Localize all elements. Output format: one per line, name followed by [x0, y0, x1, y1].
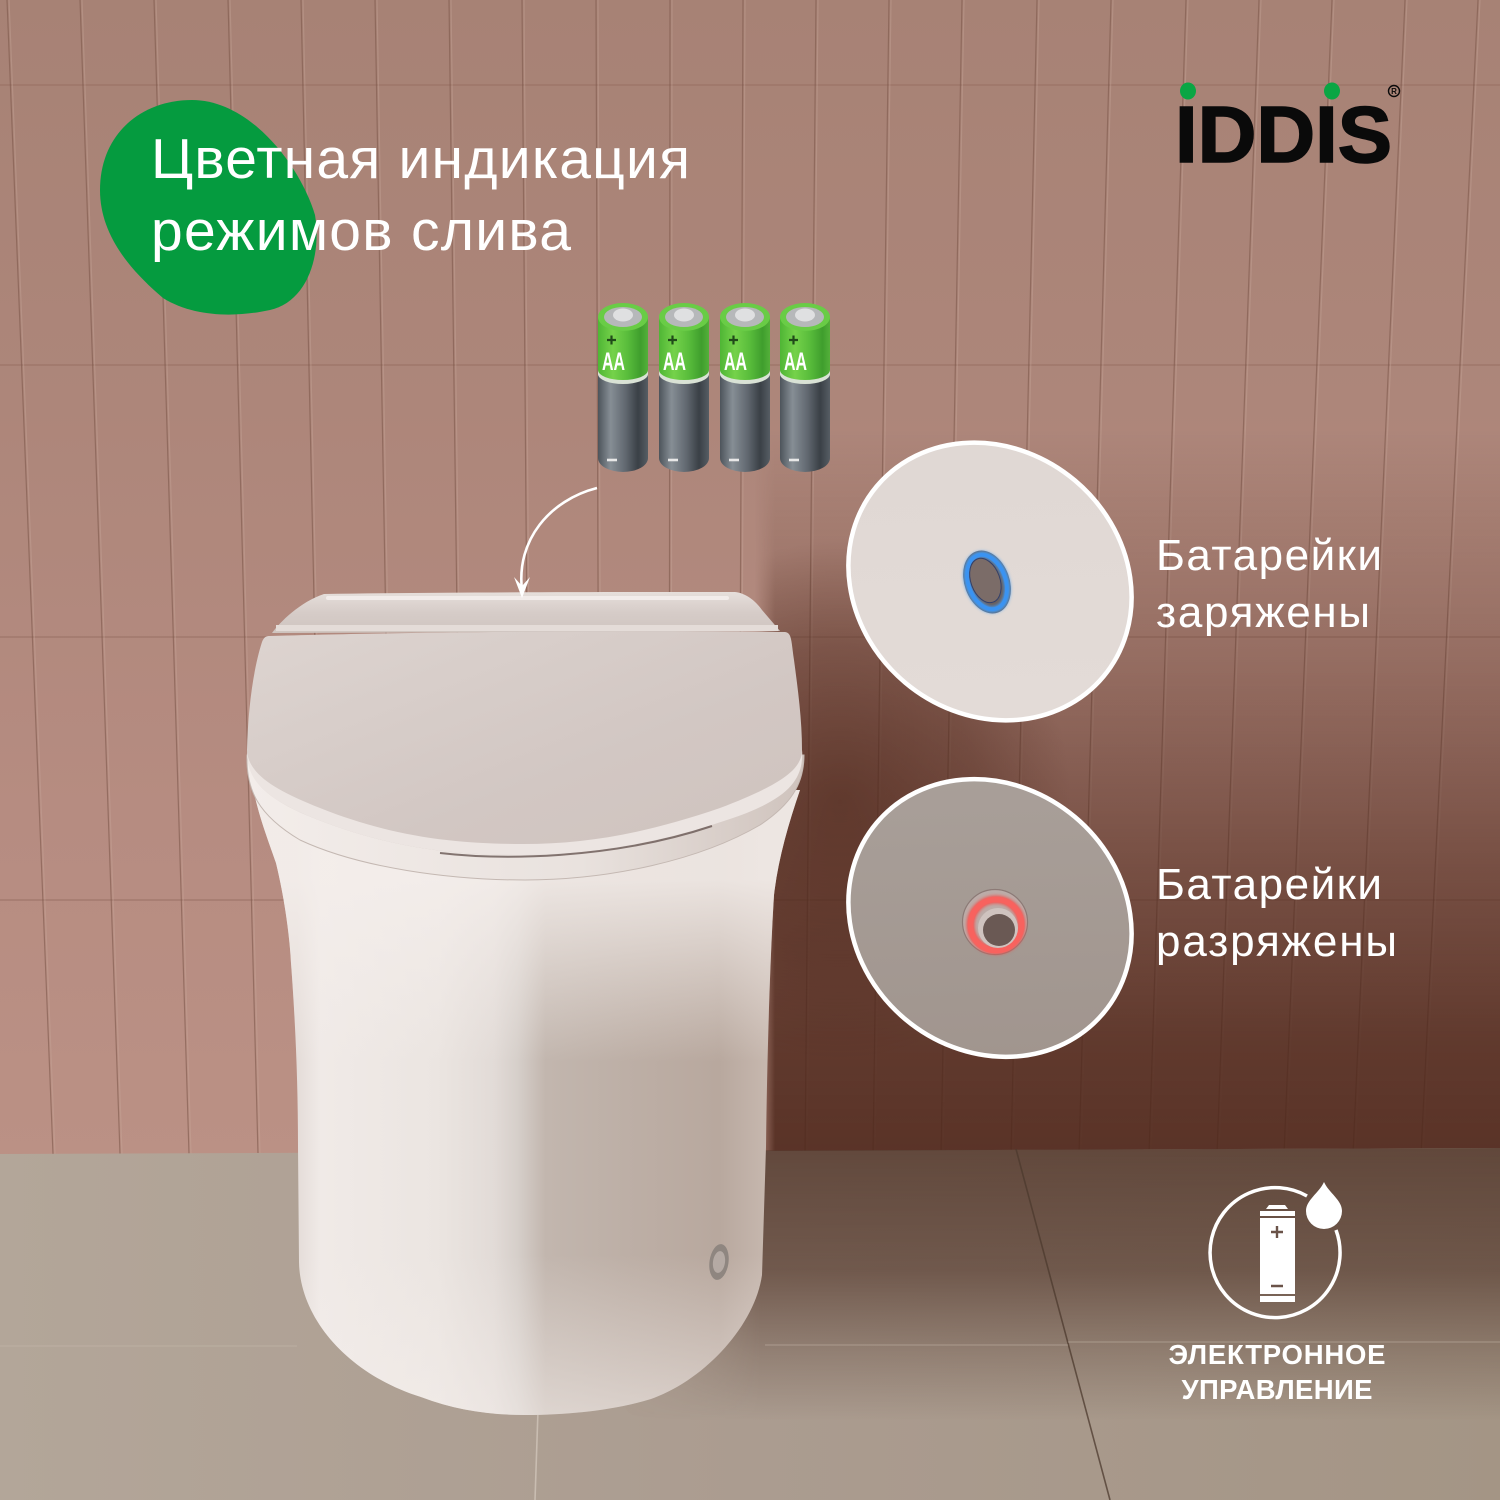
- label: electronic control: [1168, 1339, 1386, 1405]
- label: batteries charged: [1156, 531, 1382, 637]
- battery 3: AA: [724, 348, 747, 376]
- label: electronic control: ЭЛЕКТРОННОЕ: [1168, 1339, 1386, 1370]
- battery 3: [720, 303, 770, 472]
- green blob: [100, 100, 317, 315]
- label: electronic control: УПРАВЛЕНИЕ: [1182, 1374, 1372, 1405]
- battery 2: [659, 303, 709, 472]
- title: Цветная индикация: [151, 127, 690, 191]
- gap shadow: [440, 826, 712, 857]
- label: batteries low: [1156, 860, 1397, 966]
- battery 4: AA: [784, 348, 807, 376]
- wall lighting falloff: [750, 430, 1500, 1160]
- label: batteries low: Батарейки: [1156, 860, 1382, 909]
- toilet body: [253, 787, 800, 1415]
- battery 2: AA: [663, 348, 686, 376]
- arrow: batteries to tank: [514, 488, 597, 598]
- battery 1: [598, 303, 648, 472]
- title: [151, 127, 690, 263]
- label: batteries charged: заряжены: [1156, 588, 1370, 637]
- battery 1: AA: [602, 348, 625, 376]
- callout disc: batteries low: [792, 722, 1188, 1114]
- tile joints: [0, 0, 1500, 1154]
- body light overlay: [253, 787, 800, 1415]
- label: batteries low: разряжены: [1156, 917, 1397, 966]
- lid edge highlight: [247, 750, 802, 855]
- callout disc: batteries charged: [792, 385, 1188, 778]
- wall background: [0, 0, 1500, 1160]
- icon: red indicator button: [962, 890, 1028, 954]
- icon: electronic control: [1210, 1182, 1342, 1318]
- seat rim: [247, 755, 804, 880]
- battery 4: [780, 303, 830, 472]
- toilet: [247, 592, 804, 1415]
- flush tank cover: [272, 592, 780, 633]
- label: batteries charged: Батарейки: [1156, 531, 1382, 580]
- logo: IDDIS: IDDIS: [1175, 90, 1392, 179]
- lid: [247, 631, 802, 855]
- icon: blue indicator button: [955, 544, 1019, 620]
- side button: [707, 1243, 731, 1281]
- title: режимов слива: [151, 199, 571, 263]
- floor: [0, 1148, 1500, 1500]
- logo: IDDIS: R: [1391, 87, 1397, 96]
